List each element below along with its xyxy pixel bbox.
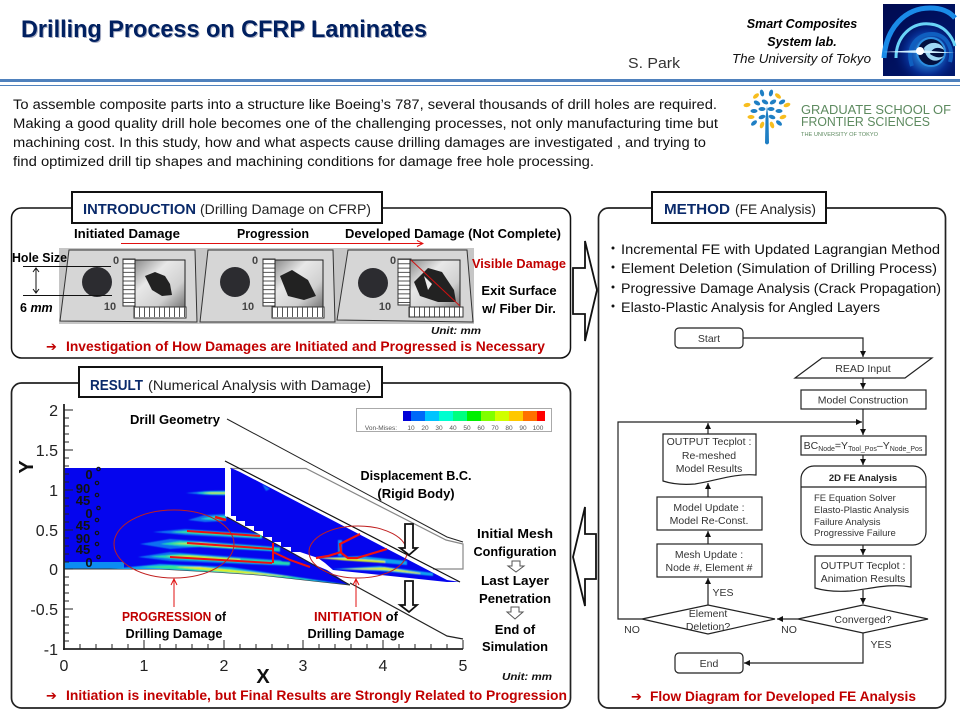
node: 2D FE analysis	[801, 466, 926, 545]
specimen 1: 0	[113, 255, 119, 267]
axis labels: 5	[459, 658, 468, 675]
layup angles: 0	[85, 506, 93, 521]
crack lines	[316, 534, 387, 558]
node: boundary condition: BC	[804, 440, 818, 452]
layup angles: 45	[76, 493, 90, 508]
flow diagram	[618, 328, 932, 673]
simulation stages: Last Layer	[481, 573, 549, 588]
intro paragraph: find optimized drill tip shapes and machining conditions for damage free hole processing.	[13, 154, 594, 169]
intro paragraph: To assemble composite parts into a structure like Boeing’s 787, several thousands of drill holes are required.	[13, 97, 717, 112]
stage labels: Progression	[237, 226, 309, 241]
axis labels: Y	[16, 460, 38, 474]
node: mesh update: Mesh Update :	[675, 549, 743, 561]
tree	[743, 89, 791, 144]
node: 2D FE analysis: Failure Analysis	[814, 517, 881, 528]
legend: von-mises colour bar: 50	[463, 425, 471, 432]
lab name: The University of Tokyo	[732, 52, 871, 66]
unit note: Unit: mm	[431, 326, 481, 337]
node: output animation: Animation Results	[821, 573, 905, 585]
node: element deletion: Deletion?	[686, 621, 730, 633]
node: mesh update: Node #, Element #	[666, 562, 753, 574]
node: boundary condition: Tool_Pos	[848, 446, 877, 453]
node: start: Start	[698, 333, 720, 345]
specimen 2	[200, 250, 335, 322]
branch labels: YES	[712, 587, 734, 599]
legend: von-mises colour bar: 20	[421, 425, 429, 432]
axis labels: 2	[220, 658, 229, 675]
simulation stages: Penetration	[479, 591, 551, 606]
conclusion: method: ➔	[631, 690, 642, 705]
specimen 3	[337, 250, 473, 322]
simulation stages: Initial Mesh	[477, 526, 553, 541]
specimen 3: 10	[379, 301, 391, 313]
legend: von-mises colour bar: 10	[407, 425, 415, 432]
branch labels: NO	[781, 624, 797, 636]
method bullets: Elasto-Plastic Analysis for Angled Layers	[621, 300, 880, 315]
node: output animation	[815, 556, 911, 591]
conclusion: result: ➔	[46, 689, 57, 704]
axis labels: X	[256, 666, 270, 688]
simulation stages: End of	[495, 622, 536, 637]
conclusion: introduction: Investigation of How Damages are Initiated and Progressed is Necessary	[66, 339, 545, 354]
heading: introduction: (Drilling Damage on CFRP)	[200, 201, 371, 217]
legend: von-mises colour bar: 100	[533, 425, 544, 432]
conclusion: introduction: ➔	[46, 340, 57, 355]
label: drill geometry: Drill Geometry	[130, 412, 221, 427]
stage labels	[74, 226, 561, 241]
axis labels: -1	[44, 642, 58, 659]
node: element deletion: Element	[689, 608, 727, 620]
node: model construction: Model Construction	[818, 394, 908, 406]
node: output animation: OUTPUT Tecplot :	[821, 560, 905, 572]
arrow: damage progression	[121, 242, 423, 244]
heading: method: (FE Analysis)	[735, 201, 816, 217]
stage labels: Initiated Damage	[74, 226, 180, 241]
label: progression: Drilling Damage	[126, 626, 222, 641]
legend: von-mises colour bar: 90	[519, 425, 527, 432]
axis labels: 4	[379, 658, 388, 675]
hole size dimension: Hole Size	[12, 250, 67, 265]
callout: initiation ellipse	[309, 526, 407, 607]
callout: progression ellipse	[114, 510, 234, 607]
axes	[63, 404, 463, 650]
node: converged	[798, 605, 928, 633]
logo wordmark: THE UNIVERSITY OF TOKYO	[801, 132, 879, 138]
specimen 1	[60, 250, 197, 322]
arrow: displacement lower	[400, 581, 417, 612]
heading: introduction: INTRODUCTION	[83, 201, 196, 218]
node: model construction	[801, 390, 926, 409]
header rule	[0, 79, 960, 86]
node: output remeshed: OUTPUT Tecplot :	[667, 436, 751, 448]
label: initiation: Drilling Damage	[308, 626, 404, 641]
node: mesh update	[657, 544, 762, 577]
method bullets: Incremental FE with Updated Lagrangian Method	[621, 242, 940, 257]
logo wordmark: FRONTIER SCIENCES	[801, 115, 930, 129]
layup angles: 90	[76, 481, 90, 496]
side labels: Exit Surface	[481, 283, 557, 298]
node: boundary condition: =Y	[835, 440, 848, 452]
heading: method	[652, 192, 826, 223]
unit note: Unit: mm	[502, 672, 552, 683]
stage labels: Developed Damage (Not Complete)	[345, 226, 561, 241]
arrow: displacement upper	[400, 524, 417, 555]
label: displacement	[360, 468, 472, 501]
label: displacement: (Rigid Body)	[377, 486, 455, 501]
axis labels: -0.5	[30, 602, 58, 619]
branch labels: YES	[870, 639, 892, 651]
branch labels	[624, 587, 892, 651]
node: model update	[657, 497, 762, 530]
legend: von-mises colour bar: 30	[435, 425, 443, 432]
logo wordmark	[801, 103, 951, 138]
node: 2D FE analysis: Elasto-Plastic Analysis	[814, 505, 909, 516]
branch labels: NO	[624, 624, 640, 636]
lab name	[732, 17, 871, 66]
node: model update: Model Re-Const.	[670, 515, 748, 527]
legend: von-mises colour bar: 70	[491, 425, 499, 432]
side labels	[472, 256, 566, 316]
panel: method	[598, 192, 946, 708]
hole size dimension: 6 mm	[20, 301, 53, 315]
axis labels	[16, 403, 468, 688]
lab name: Smart Composites	[747, 17, 857, 31]
specimen 2: 0	[252, 255, 258, 267]
axis labels: 0.5	[36, 523, 58, 540]
heading: introduction	[72, 192, 382, 223]
arrow: method to result	[573, 507, 596, 606]
node: 2D FE analysis: Progressive Failure	[814, 528, 896, 539]
legend: von-mises colour bar: 40	[449, 425, 457, 432]
axis labels: 1	[49, 483, 58, 500]
node: element deletion	[642, 605, 775, 634]
node: boundary condition	[801, 436, 926, 455]
contour: stress streaks left	[110, 490, 350, 585]
icon: lab logo swirl	[883, 4, 955, 76]
heading: result: RESULT	[90, 377, 143, 394]
conclusion: method: Flow Diagram for Developed FE Analysis	[650, 689, 916, 704]
label: initiation: INITIATION of	[314, 609, 399, 624]
node: output remeshed: Model Results	[676, 463, 742, 475]
simulation stages	[474, 526, 557, 654]
label: progression	[122, 609, 227, 641]
axis labels: 2	[49, 403, 58, 420]
label: displacement: Displacement B.C.	[360, 468, 472, 483]
side labels: w/ Fiber Dir.	[481, 301, 556, 316]
contour: blue mesh	[64, 461, 460, 585]
node: model update: Model Update :	[673, 502, 745, 514]
specimen 2: 10	[242, 301, 254, 313]
simulation stages: Configuration	[474, 544, 557, 559]
logo wordmark: GRADUATE SCHOOL OF	[801, 103, 951, 117]
hole size dimension	[12, 250, 112, 315]
side labels: Visible Damage	[472, 256, 566, 271]
icon: graduate school logo	[743, 89, 951, 144]
legend: von-mises colour bar: 80	[505, 425, 513, 432]
specimen 3: 0	[390, 255, 396, 267]
node: end	[675, 653, 743, 673]
node: read input	[795, 358, 932, 378]
legend: von-mises colour bar: Von-Mises:	[365, 425, 397, 432]
intro paragraph	[13, 97, 718, 169]
node: read input: READ Input	[835, 363, 891, 375]
label: progression: PROGRESSION of	[122, 609, 227, 624]
node: boundary condition: –Y	[877, 440, 890, 452]
heading: result: (Numerical Analysis with Damage)	[148, 377, 371, 393]
layup angles: 45	[76, 518, 90, 533]
conclusion: result: Initiation is inevitable, but Final Results are Strongly Related to Progression	[66, 688, 567, 703]
node: start	[675, 328, 743, 348]
axis labels: 1.5	[36, 443, 58, 460]
method bullets: Element Deletion (Simulation of Drilling Process)	[621, 261, 937, 276]
heading: method: METHOD	[664, 201, 730, 218]
intro paragraph: Making a good quality drill hole becomes one of the challenging processes, not only manufacturing time but	[13, 116, 718, 131]
node: output remeshed: Re-meshed	[682, 450, 736, 462]
node: boundary condition: Node	[818, 446, 835, 453]
layup angles: 45	[76, 542, 90, 557]
layup angles: 90	[76, 531, 90, 546]
layup angles	[76, 467, 100, 570]
node: output remeshed	[663, 434, 756, 484]
panel: result	[12, 367, 570, 708]
photo: three drilled specimens	[59, 248, 474, 324]
label: initiation	[308, 609, 404, 641]
simulation stages: Simulation	[482, 639, 548, 654]
axis labels: 3	[299, 658, 308, 675]
method bullets	[612, 242, 941, 315]
contour: stress streaks right	[262, 484, 433, 576]
specimen 1: 10	[104, 301, 116, 313]
heading: result	[79, 367, 382, 397]
chart: stress contour plot	[16, 403, 557, 688]
axis labels: 1	[140, 658, 149, 675]
author: S. Park	[628, 55, 681, 72]
method bullets: Progressive Damage Analysis (Crack Propagation)	[621, 281, 941, 296]
axis labels: 0	[49, 562, 58, 579]
node: converged: Converged?	[834, 614, 892, 626]
lab name: System lab.	[767, 35, 837, 49]
panel: introduction	[12, 192, 570, 358]
node: 2D FE analysis: FE Equation Solver	[814, 493, 896, 504]
layup angles: 0	[85, 555, 93, 570]
layup angles: 0	[85, 467, 93, 482]
title: Drilling Process on CFRP Laminates	[21, 16, 427, 43]
connectors	[618, 338, 863, 663]
arrow: introduction to method	[573, 241, 597, 341]
axis labels: 0	[60, 658, 69, 675]
intro paragraph: machining cost. In this study, how and what aspects cause drilling damages are investigated , and trying to	[13, 135, 706, 150]
node: end: End	[700, 658, 718, 670]
legend: von-mises colour bar: 60	[477, 425, 485, 432]
node: boundary condition: Node_Pos	[890, 446, 923, 453]
legend: von-mises colour bar	[356, 408, 552, 432]
node: 2D FE analysis: 2D FE Analysis	[829, 473, 897, 484]
drill outlines	[227, 419, 463, 639]
